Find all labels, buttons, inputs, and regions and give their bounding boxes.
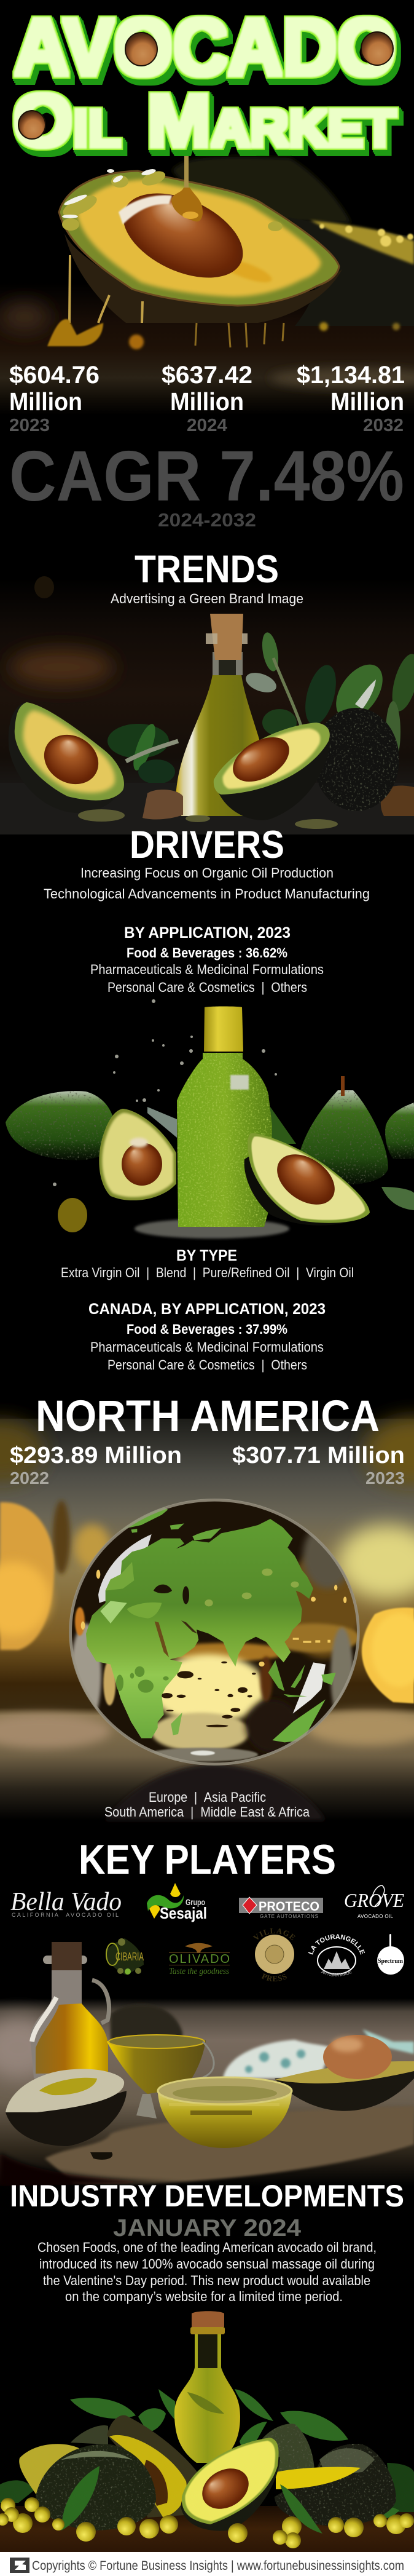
development text: the Valentine's Day period. This new product would available — [43, 2273, 370, 2288]
by application: Pharmaceuticals & Medicinal Formulations — [90, 962, 324, 977]
towel — [223, 2029, 414, 2079]
black avocado — [313, 708, 399, 811]
white window highlights — [98, 1534, 152, 1603]
Canada by application — [88, 1301, 326, 1373]
avocado half left — [99, 1109, 176, 1200]
other regions: Europe | Asia Pacific — [149, 1789, 266, 1805]
stat 2024: Million — [170, 387, 244, 416]
avocado left big — [36, 2444, 156, 2530]
avocado behind left — [71, 2425, 108, 2444]
stat 2032 — [297, 362, 405, 435]
development text: introduced its new 100% avocado sensual massage oil during — [39, 2256, 375, 2272]
leaves foreground — [280, 2484, 322, 2534]
by type: BY TYPE — [176, 1247, 237, 1264]
oil stream and droplet — [171, 156, 203, 221]
globe image — [0, 1417, 414, 1820]
avocado pit letter counters — [18, 32, 393, 139]
logo: Spectrum — [377, 1934, 404, 1975]
glass globe — [61, 1494, 369, 1771]
by type: Extra Virgin Oil | Blend | Pure/Refined Oil | Virgin Oil — [61, 1265, 354, 1280]
development text — [37, 2240, 377, 2304]
North America values: 2023 — [365, 1468, 405, 1488]
title line: Oil Market: Oil — [13, 79, 121, 162]
Canada by application: Personal Care & Cosmetics | Others — [107, 1357, 307, 1373]
logo: Spectrum: Spectrum — [378, 1957, 403, 1965]
stat 2024 — [162, 362, 252, 435]
stat 2024: 2024 — [187, 416, 227, 435]
green bottle — [177, 1006, 272, 1227]
avocado left — [9, 702, 126, 813]
stat 2032: $1,134.81 — [297, 362, 405, 389]
title line: Avocado: AVOCADO — [14, 2, 396, 92]
oil bottle — [30, 1942, 109, 2079]
driver items — [44, 865, 370, 902]
by application — [90, 924, 324, 995]
logo: Olivado: OLIVADO — [169, 1952, 230, 1966]
logo: Olivado: Taste the goodness — [169, 1967, 229, 1976]
bokeh lights — [0, 1502, 414, 1703]
stat 2023: Million — [9, 387, 82, 416]
Canada by application: Pharmaceuticals & Medicinal Formulations — [90, 1339, 324, 1355]
logo: Village Press: PRESS — [262, 1973, 287, 1981]
title line: Oil Market — [13, 79, 396, 162]
capsules — [78, 809, 338, 829]
small yellow fruit — [58, 1198, 87, 1232]
table — [0, 2506, 414, 2552]
logo: Grupo Sesajal — [147, 1883, 207, 1922]
whole green avocados — [6, 1076, 414, 1210]
footer — [0, 2552, 414, 2576]
drivers heading: DRIVERS — [130, 823, 284, 866]
cut avocado centre left — [107, 2415, 200, 2518]
Canada by application: CANADA, BY APPLICATION, 2023 — [88, 1301, 326, 1318]
bottle — [176, 614, 271, 816]
footer logo — [10, 2558, 29, 2573]
by application: BY APPLICATION, 2023 — [124, 924, 291, 941]
other regions: South America | Middle East & Africa — [104, 1804, 310, 1820]
avocado right half — [214, 723, 330, 820]
stat 2032: 2032 — [363, 416, 404, 435]
logo: Olivado — [169, 1943, 230, 1976]
stat 2023: 2023 — [9, 416, 50, 435]
hero image: avocado half with dripping oil — [0, 156, 414, 415]
avocado behind — [111, 2004, 182, 2042]
reflection dots — [161, 1662, 256, 1727]
trend item: Advertising a Green Brand Image — [111, 591, 303, 606]
avocado right big — [275, 2444, 396, 2526]
driver items: Increasing Focus on Organic Oil Production — [80, 865, 334, 881]
logo: Village Press: VILLAGE — [253, 1928, 295, 1941]
logo: La Tourangelle: ARTISAN MADE — [321, 1970, 353, 1976]
oil and avocado table image — [0, 1942, 414, 2186]
water droplets — [53, 999, 277, 1186]
amber lights — [81, 1570, 346, 1666]
key players heading: KEY PLAYERS — [79, 1836, 336, 1883]
land highlights — [205, 1569, 299, 1606]
bottle — [174, 2311, 240, 2463]
bowl — [158, 2077, 292, 2148]
avocado far left half — [19, 2444, 83, 2495]
logo: Village Press — [253, 1928, 295, 1981]
foam base — [135, 1219, 289, 1238]
Canada by application: Food & Beverages : 37.99% — [127, 1322, 287, 1337]
North America values: 2022 — [10, 1468, 49, 1488]
logo: Proteco: PROTECO — [259, 1900, 319, 1914]
CAGR period: 2024-2032 — [158, 509, 256, 531]
title line: Oil Market: Market — [147, 79, 396, 162]
date: JANUARY 2024 — [113, 2215, 301, 2241]
avocado halved with seed — [181, 2438, 280, 2531]
logo: La Tourangelle: LA TOURANGELLE — [308, 1934, 365, 1955]
stat 2024: $637.42 — [162, 362, 252, 389]
avocado half right — [244, 1133, 370, 1226]
logo: Bella Vado: Bella Vado — [10, 1888, 122, 1916]
logo: Cibaria — [106, 1938, 144, 1975]
North America heading: NORTH AMERICA — [36, 1392, 380, 1441]
leaves — [0, 2389, 414, 2519]
drivers section — [44, 823, 370, 995]
development text: Chosen Foods, one of the leading American avocado oil brand, — [37, 2240, 377, 2255]
title — [13, 2, 396, 162]
leaves — [107, 631, 414, 784]
avocado right — [275, 2035, 414, 2111]
logo: La Tourangelle — [308, 1934, 365, 1976]
closing image: bottle, avocados and capsules — [0, 2311, 414, 2552]
rocks — [143, 786, 414, 819]
yellow slice — [276, 2467, 361, 2489]
gravy boat — [107, 2034, 214, 2118]
type image: green bottle with avocados — [6, 999, 414, 1238]
logo: Proteco — [239, 1897, 323, 1919]
by type — [61, 1247, 354, 1280]
logo: Grupo Sesajal: Sesajal — [160, 1904, 207, 1922]
logo: Cibaria: CIBARIA — [115, 1951, 144, 1963]
North America values — [10, 1443, 405, 1488]
logo: Proteco: GATE AUTOMATIONS — [260, 1914, 318, 1919]
logo: Grove — [344, 1885, 404, 1919]
board — [45, 2106, 414, 2184]
avocado behind right — [256, 2423, 314, 2478]
by application: Personal Care & Cosmetics | Others — [107, 980, 307, 995]
development text: on the company’s website for a limited time period. — [65, 2289, 343, 2304]
logo: Bella Vado: CALIFORNIA AVOCADO OIL — [12, 1912, 119, 1918]
North America values: $307.71 Million — [232, 1443, 405, 1468]
avocado left — [6, 2069, 127, 2146]
market size stats — [9, 362, 405, 435]
logo: Grove: GROVE — [344, 1889, 404, 1911]
avocado seed — [110, 176, 256, 295]
continents — [86, 1507, 336, 1742]
trends image: oil bottle with avocados — [0, 576, 414, 834]
other regions — [104, 1789, 310, 1820]
stat 2032: Million — [330, 387, 404, 416]
logo: Grupo Sesajal: Grupo — [186, 1897, 205, 1907]
logo: Grove: AVOCADO OIL — [357, 1914, 394, 1919]
by application: Food & Beverages : 36.62% — [127, 945, 287, 961]
North America values: $293.89 Million — [10, 1443, 182, 1468]
stat 2023 — [9, 362, 100, 435]
table reflections — [0, 1711, 414, 1820]
trends heading: TRENDS — [135, 548, 279, 591]
stat 2023: $604.76 — [9, 362, 100, 389]
oil capsules — [0, 2497, 414, 2548]
driver items: Technological Advancements in Product Manufacturing — [44, 886, 370, 902]
